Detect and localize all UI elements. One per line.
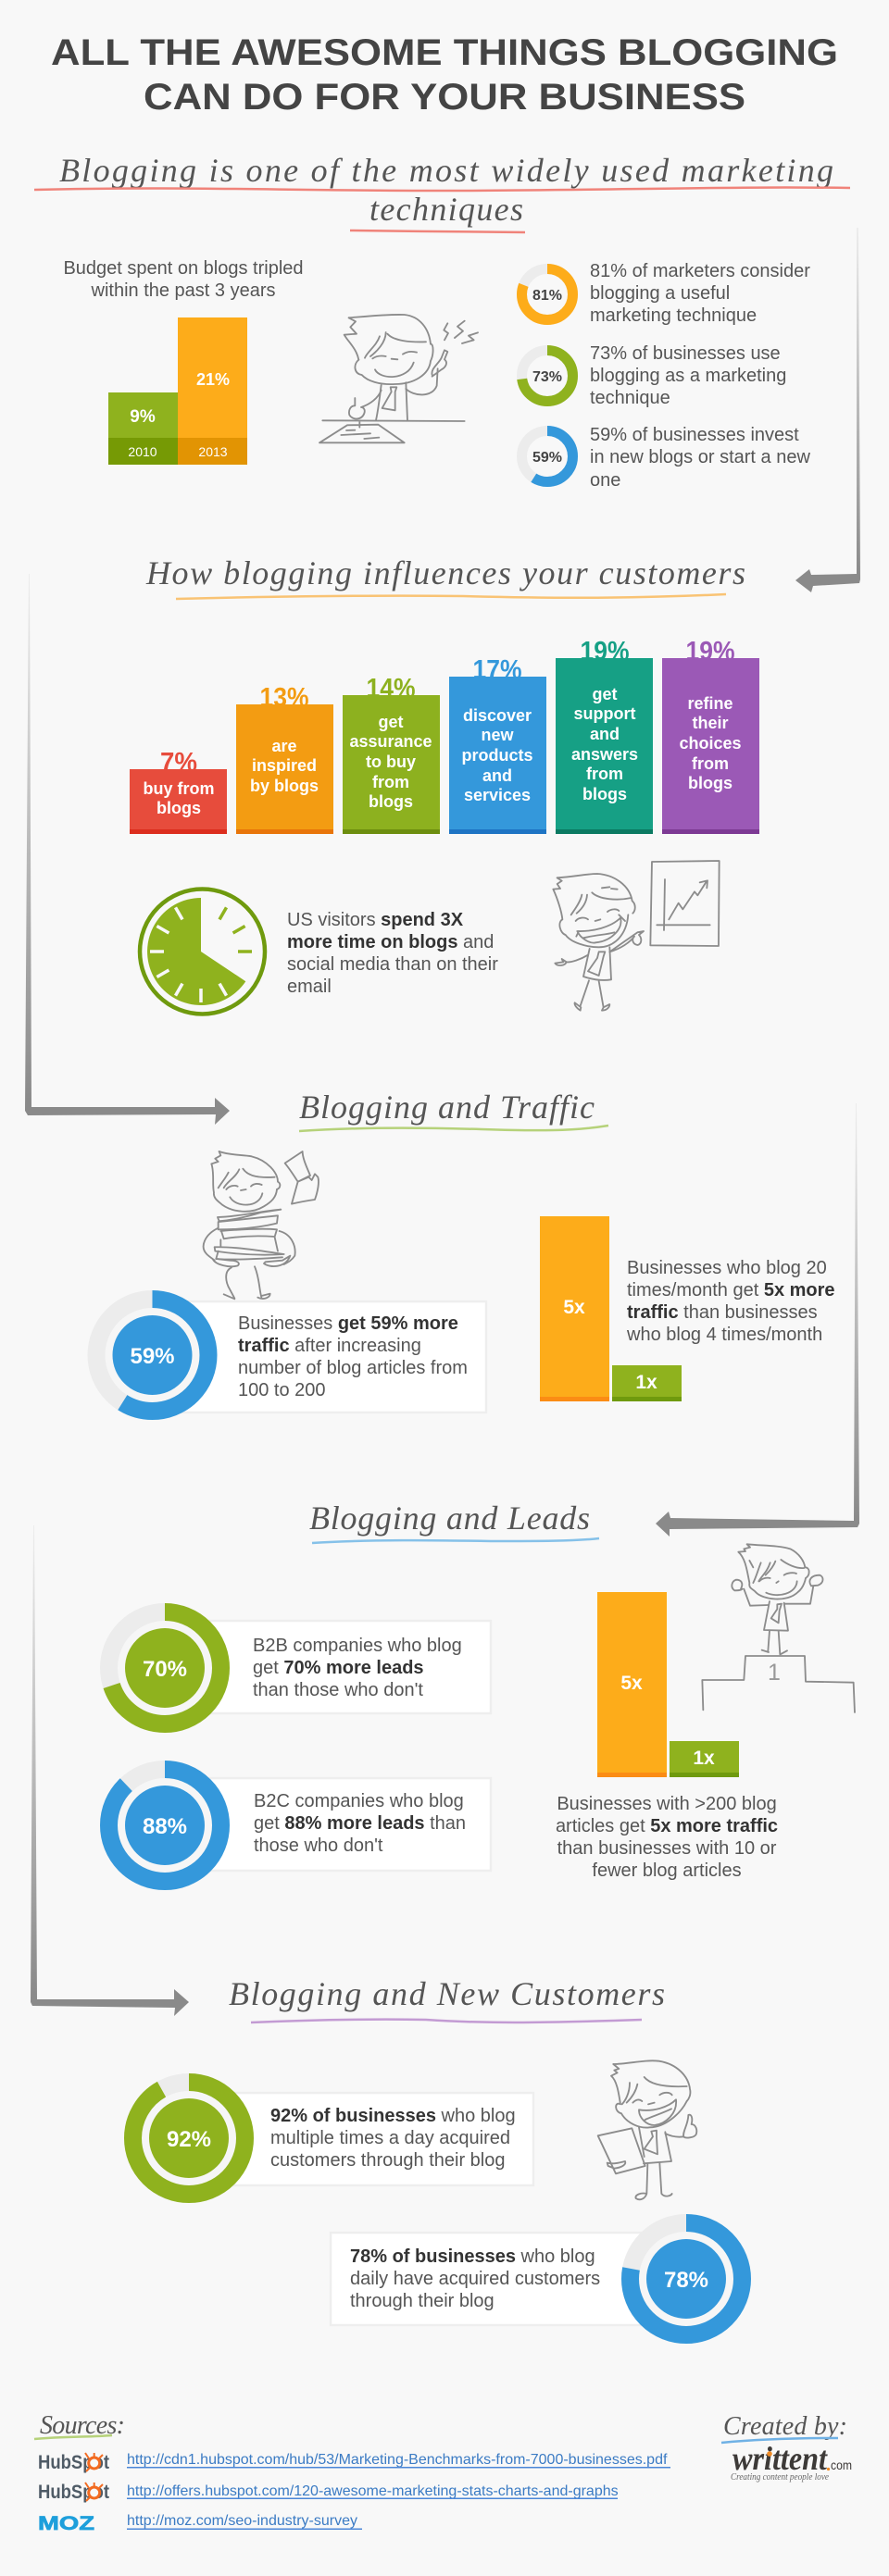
panel: 92% of businesses [133, 2083, 533, 2194]
donut: 59%: 59% [532, 450, 562, 466]
text: 5x leads: articles get 5x more traffic [556, 1816, 778, 1836]
heading: section 3: Blogging and Traffic [299, 1089, 595, 1126]
text: 73% stat: technique [590, 388, 670, 408]
panel: 78% of businesses [331, 2223, 743, 2334]
panel: budget tripled chart: 2010 [128, 444, 157, 459]
text: B2B: get 70% more leads [253, 1658, 424, 1678]
bar: 14%: assurance [349, 732, 432, 751]
bar: 13%: are [271, 737, 297, 755]
bar: 19% support [556, 637, 653, 834]
panel: 59% more traffic [96, 1300, 486, 1412]
donut: 59% [96, 1300, 208, 1411]
text: 81% stat: marketing technique [590, 305, 757, 326]
arrow: section 3 to section 4 [656, 1103, 859, 1537]
text: 92% [270, 2106, 516, 2171]
donut: 78%: 78% [664, 2268, 708, 2293]
text: B2B: B2B companies who blog [253, 1636, 462, 1656]
logo: HubSpot 1: HubSpot [38, 2452, 109, 2473]
text: B2B [253, 1636, 462, 1700]
bar: 13% [236, 683, 333, 834]
bar: 17%: discover [463, 706, 532, 725]
bar chart: 5x traffic: 5x [563, 1297, 585, 1318]
bar: 19% support: get [593, 685, 618, 703]
text: B2B: than those who don't [253, 1680, 423, 1700]
text: 59% stat: 59% of businesses invest [590, 425, 799, 445]
bar: 17%: and [482, 766, 512, 785]
donut: 70% [109, 1612, 220, 1724]
text: B2C: get 88% more leads than [254, 1813, 466, 1834]
panel: budget tripled chart: 21% [196, 370, 230, 389]
link: source 2: http://offers.hubspot.com/120-awesome-marketing-stats-charts-and-graphs [127, 2483, 619, 2499]
heading: section 1: techniques [369, 191, 523, 228]
heading: created by: Created by: [723, 2412, 847, 2441]
icon: character with chart board [553, 861, 720, 1011]
text: 59% stat [590, 425, 810, 491]
bar: 7%: buy from [143, 779, 215, 798]
text: 81% stat: 81% of marketers consider [590, 261, 810, 281]
text: 78%: through their blog [350, 2291, 495, 2311]
title: ALL THE AWESOME THINGS BLOGGING [51, 32, 838, 73]
bar: 19% support: support [574, 704, 635, 723]
icon: character on podium [702, 1544, 855, 1712]
bar: 14%: to buy [366, 753, 416, 771]
text: 59% traffic [238, 1313, 468, 1400]
donut: 81% [522, 268, 572, 320]
donut: 92%: 92% [167, 2127, 211, 2152]
bar: 19% support: from [586, 765, 623, 783]
bar: 13%: by blogs [250, 777, 319, 795]
text: 78%: daily have acquired customers [350, 2269, 600, 2289]
text: 59% traffic: number of blog articles from [238, 1358, 468, 1378]
text: 59% traffic: Businesses get 59% more [238, 1313, 458, 1334]
bar: 14%: get [378, 713, 404, 731]
donut: 70%: 70% [143, 1657, 187, 1682]
text: 5x leads [556, 1794, 778, 1881]
heading: section 4: Blogging and Leads [309, 1500, 590, 1537]
text: 59% traffic: 100 to 200 [238, 1380, 326, 1400]
panel: B2C 88% [109, 1770, 491, 1881]
bar: 19% support: 19% [580, 637, 630, 666]
text: 81% stat [590, 261, 810, 326]
arrow: section 4 to section 5 [31, 1525, 189, 2016]
heading: section 5: Blogging and New Customers [229, 1975, 665, 2012]
text: US visitors: social media than on their [287, 954, 498, 975]
text: 5x leads: Businesses with >200 blog [557, 1794, 777, 1814]
panel: budget tripled chart: 2013 [198, 444, 228, 459]
bar: 19% refine: blogs [688, 774, 732, 792]
icon: character on podium: 1 [768, 1660, 781, 1686]
bar: 19% refine: 19% [685, 637, 735, 666]
donut: 88%: 88% [143, 1814, 187, 1839]
text: 5x leads: fewer blog articles [592, 1860, 742, 1881]
bar: 14%: blogs [369, 792, 413, 811]
donut: 73%: 73% [532, 369, 562, 385]
text: 5x traffic [626, 1258, 835, 1345]
bar: 17%: services [464, 786, 531, 804]
donut: 92% [133, 2083, 244, 2194]
text: 73% stat: 73% of businesses use [590, 343, 781, 364]
bar: 17%: products [461, 746, 533, 765]
bar chart: 5x leads: 5x [620, 1673, 643, 1694]
donut: 73% [522, 350, 572, 402]
heading: section 1 [34, 152, 850, 232]
logo: HubSpot 2: HubSpot [38, 2482, 109, 2503]
text: 73% stat [590, 343, 786, 408]
bar: 17%: 17% [472, 655, 522, 685]
link: source 3: http://moz.com/seo-industry-survey [127, 2513, 357, 2529]
donut: 59% [522, 431, 572, 481]
text: US visitors: US visitors spend 3X [287, 910, 464, 930]
arrow: section 1 to section 2 [795, 228, 860, 592]
bar: 19% support: and [590, 725, 620, 743]
arrow: section 2 to section 3 [25, 574, 230, 1125]
bar: 13%: 13% [259, 683, 309, 713]
text: B2C: those who don't [254, 1836, 383, 1856]
text: 5x traffic: Businesses who blog 20 [627, 1258, 827, 1278]
bar: 17% [449, 655, 546, 834]
bar chart: blog influence [130, 637, 759, 834]
logo: writtent.com: Creating content people love [731, 2471, 829, 2483]
bar: 14%: 14% [367, 674, 416, 703]
panel: budget tripled chart [63, 258, 304, 465]
text: 92%: 92% of businesses who blog [270, 2106, 516, 2126]
panel: budget tripled chart: Budget spent on blogs tripled [63, 258, 304, 279]
title [51, 32, 838, 118]
logo: writtent.com: com [831, 2458, 852, 2472]
bar chart: 5x leads: 1x [693, 1748, 715, 1769]
text: 59% stat: in new blogs or start a new [590, 447, 810, 467]
bar: 19% refine: their [692, 714, 729, 732]
text: 78% [350, 2246, 600, 2311]
bar: 19% refine: refine [687, 694, 733, 713]
text: 73% stat: blogging as a marketing [590, 366, 786, 386]
icon: character with document and thumbs up [598, 2060, 696, 2199]
bar chart: 5x traffic [540, 1216, 682, 1401]
heading: sources: Sources: [40, 2411, 125, 2440]
icon: clock [140, 889, 265, 1014]
text: 59% traffic: traffic after increasing [238, 1336, 421, 1356]
text: 5x traffic: traffic than businesses [627, 1302, 818, 1323]
heading: section 1: Blogging is one of the most widely used marketing [59, 152, 833, 189]
text: US visitors [287, 910, 498, 997]
link: source 1: http://cdn1.hubspot.com/hub/53/Marketing-Benchmarks-from-7000-businesses.pdf [127, 2452, 668, 2468]
text: 5x traffic: who blog 4 times/month [626, 1325, 822, 1345]
text: B2C: B2C companies who blog [254, 1791, 464, 1811]
text: US visitors: more time on blogs and [287, 932, 494, 952]
donut: 81%: 81% [532, 288, 562, 304]
bar: 19% refine: choices [679, 734, 742, 753]
text: 5x traffic: times/month get 5x more [627, 1280, 835, 1300]
text: 78%: 78% of businesses who blog [350, 2246, 595, 2267]
bar: 19% refine: from [692, 754, 729, 773]
bar: 13%: inspired [252, 756, 317, 775]
panel: B2B 70% [109, 1612, 491, 1724]
bar: 7%: 7% [160, 748, 197, 778]
bar: 7% [130, 748, 227, 834]
text: US visitors: email [287, 977, 332, 997]
bar: 14% [343, 674, 440, 834]
donut: 59%: 59% [130, 1344, 175, 1369]
text: 81% stat: blogging a useful [590, 283, 730, 304]
bar: 14%: from [372, 773, 409, 791]
bar: 19% support: blogs [582, 785, 627, 803]
icon: character writing at desk [319, 315, 478, 442]
text: 92%: customers through their blog [270, 2150, 505, 2171]
panel: marketer statistics [522, 261, 810, 491]
panel: budget tripled chart: 9% [130, 407, 156, 427]
donut: 78% [630, 2223, 743, 2334]
icon: character carrying books [204, 1151, 319, 1299]
donut: 88% [109, 1770, 220, 1881]
title: CAN DO FOR YOUR BUSINESS [144, 77, 745, 118]
heading: section 2: How blogging influences your customers [145, 554, 745, 591]
text: 92%: multiple times a day acquired [270, 2128, 510, 2148]
text: 59% stat: one [590, 470, 620, 491]
bar chart: 5x traffic: 1x [635, 1372, 657, 1393]
bar: 19% refine [662, 637, 759, 834]
bar: 7%: blogs [157, 799, 201, 817]
bar: 17%: new [481, 726, 514, 744]
panel: budget tripled chart: within the past 3 years [91, 280, 276, 301]
bar: 19% support: answers [571, 745, 638, 764]
logo: Moz: MOZ [38, 2513, 94, 2534]
bar chart: 5x leads [597, 1592, 739, 1777]
logo: writtent.com: writtent [732, 2440, 828, 2477]
text: 5x leads: than businesses with 10 or [557, 1838, 777, 1859]
text: B2C [254, 1791, 466, 1856]
